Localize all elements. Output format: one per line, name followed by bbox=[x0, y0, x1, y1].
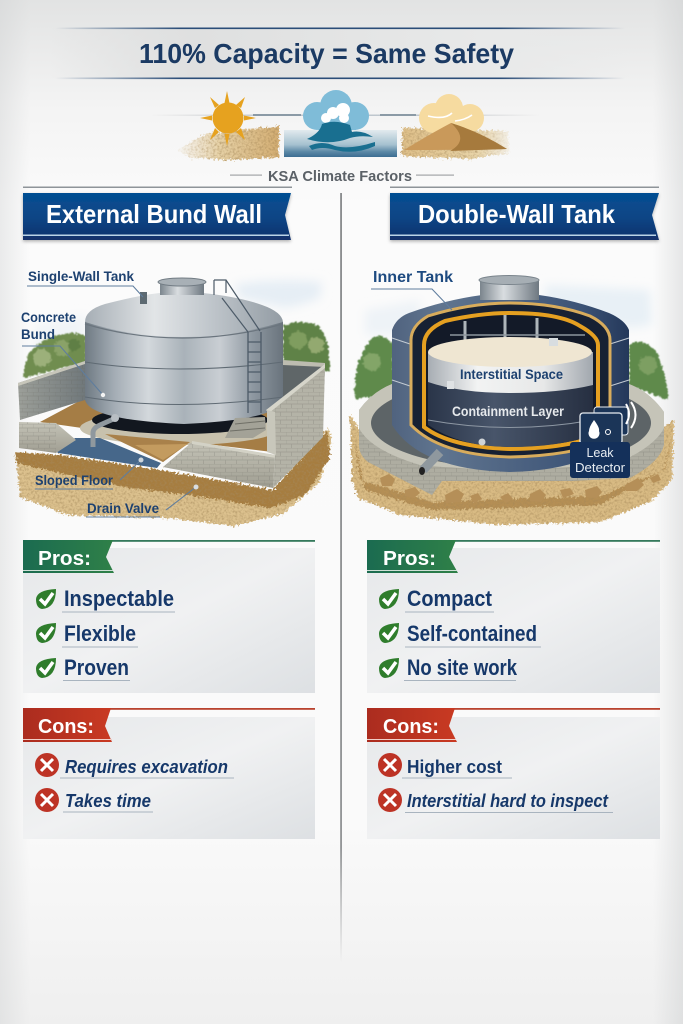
pros list: Self-contained bbox=[407, 621, 537, 646]
illustration: external bund wall tank: Concrete bbox=[21, 309, 76, 325]
tag: Cons bbox=[23, 708, 112, 742]
icon: sun over sand bbox=[178, 91, 279, 160]
bushes bbox=[24, 322, 330, 378]
illustration: external bund wall tank: Drain Valve bbox=[87, 500, 159, 516]
illustration: double-wall tank bbox=[350, 269, 674, 525]
pros list: Flexible bbox=[64, 621, 136, 646]
pros list: Proven bbox=[64, 655, 129, 680]
illustration: double-wall tank: Interstitial Space bbox=[460, 366, 563, 382]
cons list: Interstitial hard to inspect bbox=[407, 791, 609, 811]
left wall bbox=[18, 361, 85, 420]
tag: Pros bbox=[23, 540, 114, 573]
panel: left cons bbox=[23, 708, 315, 839]
illustration: external bund wall tank: Sloped Floor bbox=[35, 472, 113, 488]
illustration: external bund wall tank bbox=[15, 268, 332, 526]
pros list: No site work bbox=[407, 655, 518, 680]
tank bbox=[92, 406, 268, 434]
title: 110% Capacity = Same Safety bbox=[139, 38, 514, 69]
back right wall bbox=[267, 362, 325, 410]
column heading: Double-Wall Tank bbox=[390, 186, 659, 240]
outer orange wall bbox=[411, 303, 610, 457]
panel: right cons bbox=[367, 708, 660, 839]
pros list bbox=[36, 586, 175, 680]
cons list: Higher cost bbox=[407, 757, 502, 777]
valve bbox=[423, 452, 440, 470]
tank body bbox=[392, 295, 629, 472]
cons list bbox=[35, 753, 234, 812]
cons list: Requires excavation bbox=[65, 757, 228, 777]
leader and labels bbox=[371, 289, 452, 310]
ground bbox=[350, 415, 674, 525]
tag: Pros: Pros: bbox=[38, 548, 91, 570]
tag: Pros: Pros: bbox=[383, 548, 436, 570]
icon: sandstorm over dunes bbox=[402, 94, 509, 159]
icon: leak detector bbox=[570, 402, 636, 478]
pros list: Inspectable bbox=[64, 586, 174, 611]
column heading: Double-Wall Tank: Double-Wall Tank bbox=[418, 199, 615, 229]
illustration: double-wall tank: Inner Tank bbox=[373, 269, 453, 286]
roof supports bbox=[465, 315, 537, 340]
column heading: External Bund Wall: External Bund Wall bbox=[46, 199, 262, 229]
pros list: Compact bbox=[407, 586, 493, 611]
floor bbox=[40, 398, 290, 462]
cons list bbox=[378, 753, 613, 812]
right wall bbox=[267, 365, 325, 488]
ladder bbox=[214, 280, 261, 413]
icon: leak detector: Leak bbox=[586, 446, 614, 460]
rocks bbox=[380, 474, 661, 503]
bund ring bbox=[359, 384, 664, 495]
column heading: External Bund Wall bbox=[23, 186, 292, 240]
tag: Cons bbox=[367, 708, 457, 742]
bushes bbox=[355, 336, 668, 400]
steps bbox=[225, 417, 266, 438]
tag: Pros bbox=[367, 540, 458, 573]
inner tank bbox=[428, 352, 593, 447]
illustration: external bund wall tank: Bund bbox=[21, 326, 55, 342]
labels with leaders bbox=[22, 286, 196, 517]
illustration: external bund wall tank: Single-Wall Tank bbox=[28, 268, 134, 284]
caption: KSA Climate Factors: KSA Climate Factors bbox=[268, 168, 412, 185]
center divider bbox=[340, 193, 342, 963]
tag: Cons: Cons: bbox=[38, 716, 94, 738]
tag: Cons: Cons: bbox=[383, 716, 439, 738]
illustration: double-wall tank: Containment Layer bbox=[452, 403, 564, 419]
cons list: Takes time bbox=[65, 791, 151, 811]
pros list bbox=[379, 586, 541, 680]
icon: leak detector: Detector bbox=[575, 461, 625, 475]
inner orange wall bbox=[424, 313, 598, 449]
ground bbox=[15, 428, 332, 526]
panel: right pros bbox=[367, 540, 660, 693]
pipe bbox=[93, 417, 118, 447]
front wall bbox=[163, 442, 275, 488]
panel: left pros bbox=[23, 540, 315, 693]
climate factors icon row bbox=[150, 90, 540, 160]
title bbox=[50, 28, 630, 79]
icon: storm cloud over waves bbox=[284, 90, 397, 157]
